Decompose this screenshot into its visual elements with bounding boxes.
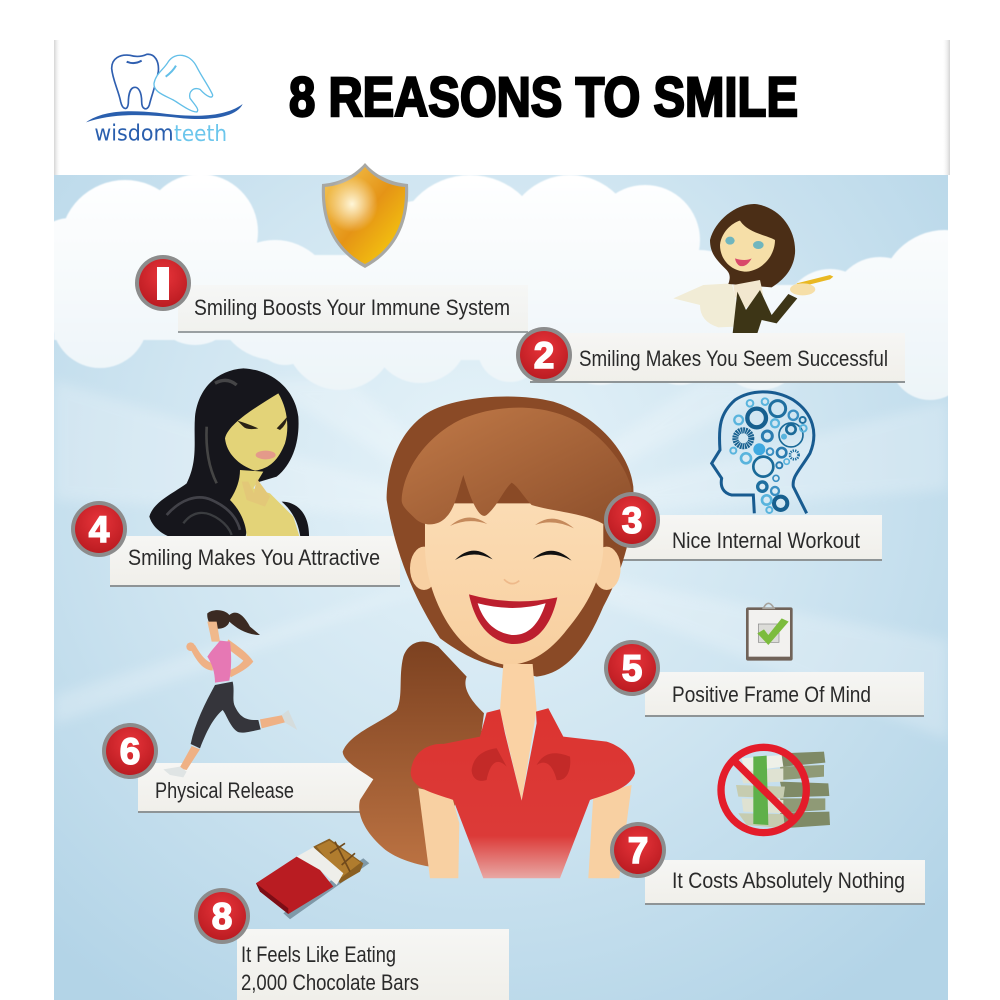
ear left — [410, 547, 438, 590]
neck — [500, 664, 537, 801]
label bar — [645, 860, 925, 904]
face — [225, 393, 287, 471]
eyebrows — [450, 517, 487, 526]
icon: runner — [163, 610, 297, 777]
head outline — [712, 392, 814, 513]
collar shadow right — [537, 753, 570, 780]
logo: wisdom teeth — [86, 54, 243, 147]
ponytail — [343, 641, 484, 867]
face — [207, 622, 220, 642]
number badge — [516, 327, 572, 383]
label bar — [237, 929, 509, 1000]
label text line 1: It Feels Like Eating — [241, 942, 396, 967]
hand — [242, 478, 270, 507]
panel: clouds — [30, 174, 1000, 400]
label text line 2: 2,000 Chocolate Bars — [241, 970, 419, 995]
ear right — [593, 547, 621, 590]
eyes and mouth — [725, 237, 735, 245]
icon: chocolate bar — [256, 839, 369, 919]
icon: light blue tooth — [154, 55, 213, 112]
prohibition sign — [721, 747, 806, 833]
panel: reason 3 — [620, 515, 882, 561]
label bar — [645, 672, 924, 716]
leggings — [191, 682, 261, 748]
icon: shield — [322, 163, 408, 268]
number badge — [71, 501, 127, 557]
central smiling woman — [343, 397, 635, 878]
label text: Smiling Boosts Your Immune System — [194, 295, 510, 320]
shirt — [411, 708, 635, 878]
hair — [710, 204, 795, 287]
panel: reason 7 — [645, 860, 925, 905]
jacket — [733, 290, 797, 333]
box — [758, 624, 779, 642]
gears — [730, 398, 807, 513]
left arm — [418, 788, 459, 878]
icon: no money — [721, 747, 830, 833]
right page edge — [942, 40, 950, 175]
collar shadow left — [472, 748, 507, 781]
ponytail and hair — [207, 610, 260, 635]
panel: reason 8 — [194, 888, 509, 1000]
badge 3 — [604, 492, 660, 548]
number badge — [194, 888, 250, 944]
number badge: 8 — [212, 896, 232, 937]
hair shine — [167, 497, 240, 530]
badge 5 — [604, 640, 660, 696]
legs — [179, 746, 200, 770]
badge 3: 3 — [622, 500, 642, 541]
pencil and hand — [797, 275, 833, 287]
papers — [673, 283, 737, 327]
bar shadow — [283, 858, 369, 919]
left page edge — [54, 40, 61, 175]
label bar — [530, 333, 905, 382]
label text: It Costs Absolutely Nothing — [672, 868, 905, 893]
far shoulder hair — [282, 502, 309, 538]
number badge: 4 — [89, 509, 110, 550]
number badge — [135, 255, 191, 311]
chocolate — [313, 839, 363, 883]
paper — [749, 610, 790, 657]
icon: black-haired woman — [149, 368, 309, 538]
icon: clipboard — [746, 603, 793, 661]
lips — [256, 451, 276, 459]
label text: Smiling Makes You Attractive — [128, 545, 380, 570]
label text: Smiling Makes You Seem Successful — [579, 346, 888, 371]
number badge: 2 — [534, 335, 554, 376]
fringe — [402, 408, 632, 525]
arms — [189, 645, 213, 671]
face — [425, 503, 603, 665]
label bar — [620, 515, 882, 560]
panel: reason 2 — [516, 327, 905, 383]
face — [720, 221, 775, 272]
collar — [733, 280, 763, 308]
badge 7: 7 — [628, 830, 648, 871]
panel: reason 5 — [645, 672, 924, 717]
logo wordmark: wisdom — [94, 122, 174, 147]
cash stack — [736, 752, 830, 828]
label text: Positive Frame Of Mind — [672, 682, 871, 707]
clip — [763, 603, 774, 608]
badge 5: 5 — [622, 648, 642, 689]
badge 7 — [610, 822, 666, 878]
label text: Physical Release — [155, 778, 294, 803]
shoes — [163, 767, 187, 777]
label bar — [138, 763, 378, 812]
board — [746, 607, 793, 661]
number badge — [102, 723, 158, 779]
label bar — [178, 285, 528, 332]
label bar — [110, 536, 400, 586]
eyes — [237, 421, 258, 429]
foil — [297, 847, 343, 885]
icon: blue tooth — [112, 54, 158, 109]
right arm — [588, 785, 632, 878]
top — [207, 641, 231, 683]
icon: businesswoman — [673, 204, 833, 333]
hair back — [387, 397, 634, 677]
icon: head with gears — [712, 392, 814, 513]
check mark — [757, 618, 789, 645]
number badge: 6 — [120, 731, 140, 772]
nose — [504, 579, 519, 584]
red wrapper — [256, 857, 333, 914]
sun rays — [54, 380, 948, 740]
neck and chest — [230, 470, 300, 538]
teeth — [478, 603, 546, 635]
logo wordmark: teeth: teeth — [174, 122, 227, 147]
back hair — [149, 368, 299, 538]
panel: reason 1 — [135, 255, 528, 333]
panel: sky background — [54, 175, 948, 1000]
logo swoosh — [86, 104, 243, 122]
title: 8 REASONS TO SMILE — [289, 65, 798, 128]
eyes — [455, 551, 493, 560]
panel: reason 6 — [102, 723, 378, 813]
panel: reason 4 — [71, 501, 400, 587]
label text: Nice Internal Workout — [672, 528, 860, 553]
mouth — [469, 594, 557, 644]
